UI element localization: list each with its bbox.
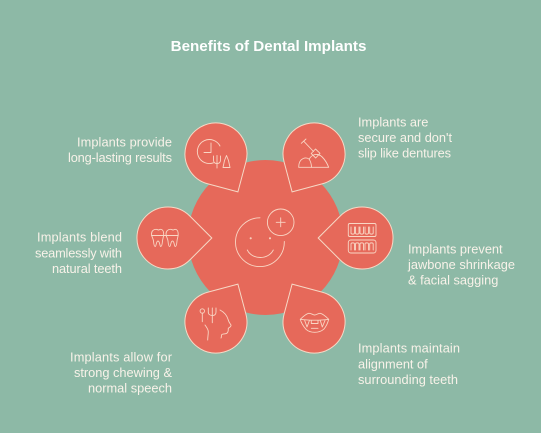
label: chewing: Implants allow for <box>70 350 173 365</box>
label: secure: secure and don't <box>358 130 452 145</box>
label: jawbone <box>407 242 515 288</box>
icon: head profile with tools <box>200 308 231 340</box>
icon: shovel and soil <box>299 139 329 167</box>
petal: top right <box>283 123 345 192</box>
label: alignment: alignment of <box>358 357 428 372</box>
label: chewing: strong chewing & <box>74 365 172 380</box>
petal: left <box>137 207 212 269</box>
label: alignment: Implants maintain <box>358 341 460 356</box>
icon: teeth with braces <box>152 229 178 246</box>
label: chewing <box>70 350 173 396</box>
label: jawbone: & facial sagging <box>408 273 498 288</box>
icon: mouth with fangs <box>300 313 329 332</box>
label: secure <box>358 115 452 161</box>
label: chewing: normal speech <box>88 381 172 396</box>
label: secure: Implants are <box>358 115 428 130</box>
petal: bottom left <box>185 284 247 353</box>
icon: smiling face with plus <box>236 209 294 267</box>
petal: top left <box>185 123 247 192</box>
icon: clock and dental tools <box>197 140 230 168</box>
label: alignment <box>358 341 460 387</box>
label: long-lasting results: Implants provide <box>77 135 172 150</box>
label: blend: Implants blend <box>37 230 122 245</box>
label: long-lasting results: long-lasting results <box>68 150 172 165</box>
label: blend: natural teeth <box>52 261 122 276</box>
label: secure: slip like dentures <box>358 146 451 161</box>
label: blend: seamlessly with <box>35 246 122 261</box>
label: long-lasting results <box>68 135 172 165</box>
central circle <box>188 160 343 315</box>
icon: dentures <box>348 224 376 253</box>
petal: bottom right <box>283 284 345 353</box>
title: Benefits of Dental Implants <box>171 38 366 55</box>
petal: right <box>318 207 393 269</box>
label: jawbone: jawbone shrinkage <box>407 257 515 272</box>
label: blend <box>35 230 122 276</box>
label: jawbone: Implants prevent <box>408 242 503 257</box>
label: alignment: surrounding teeth <box>358 372 458 387</box>
